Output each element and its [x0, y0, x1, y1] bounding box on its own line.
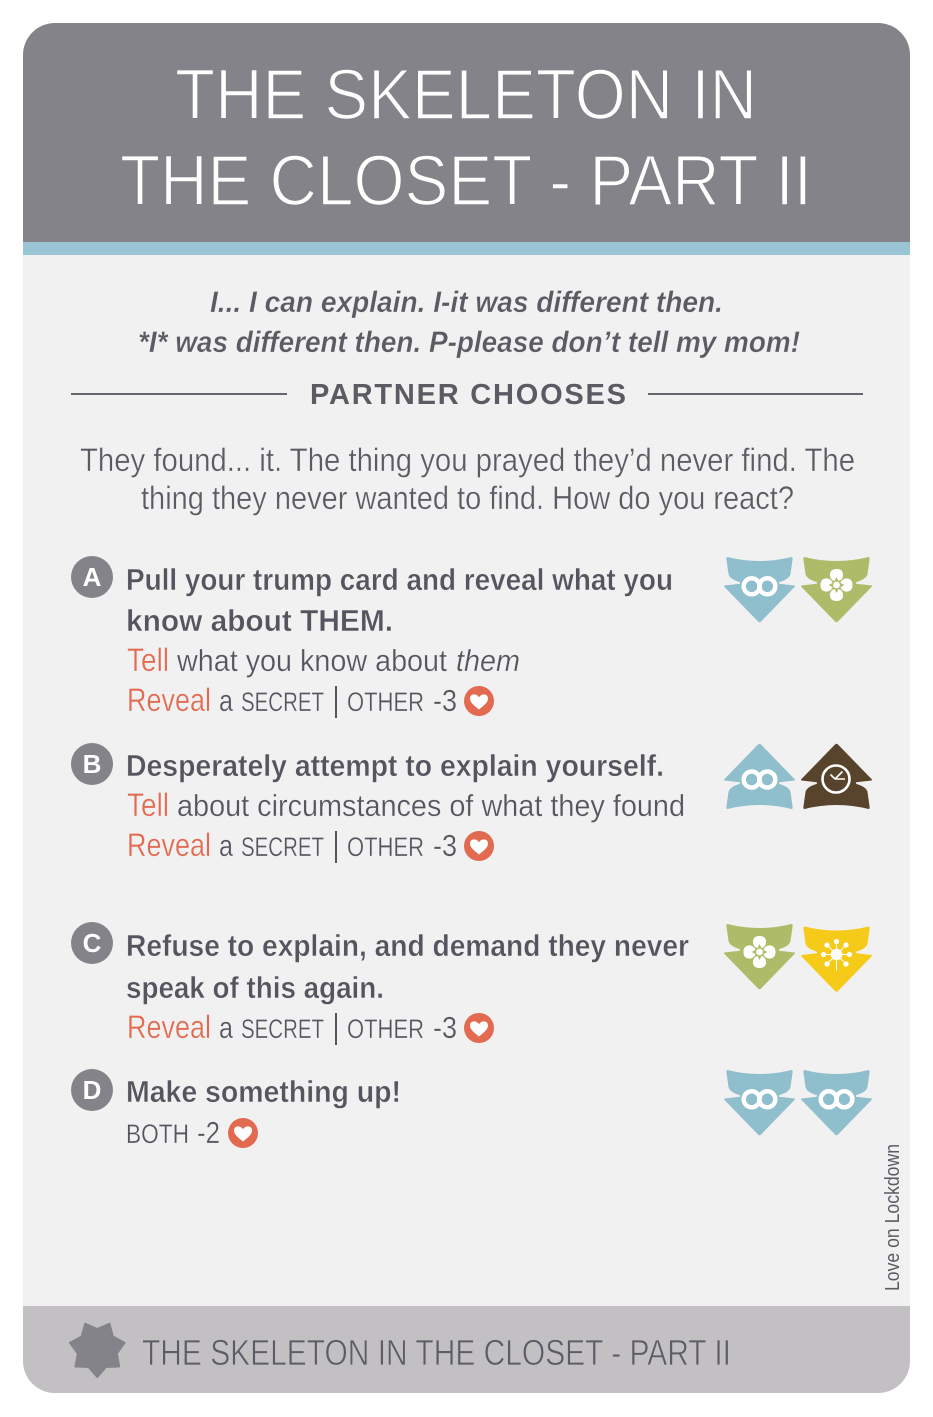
icon: heart	[464, 831, 494, 861]
option D cost line	[126, 1115, 220, 1150]
option C heading: Refuse to explain, and demand they never	[126, 928, 689, 963]
option A reveal line: -3	[433, 683, 457, 718]
icon: yellow burst arrow	[801, 926, 872, 992]
option A reveal line: Reveal	[127, 682, 211, 718]
option B reveal line	[127, 827, 457, 863]
badge A	[71, 556, 113, 598]
option A tell line: them	[456, 643, 520, 678]
option C reveal line: SECRET	[241, 1014, 324, 1044]
icon: heart	[228, 1118, 258, 1148]
option A reveal line	[127, 682, 457, 718]
title	[120, 56, 812, 221]
option A heading	[126, 562, 673, 638]
option B reveal line: a	[219, 828, 234, 863]
intro text: They found... it. The thing you prayed they’d never find. The	[80, 442, 855, 478]
badge D: D	[83, 1075, 101, 1105]
option D heading: Make something up!	[126, 1074, 401, 1109]
badge B: B	[83, 749, 101, 779]
title: THE CLOSET - PART II	[120, 142, 812, 221]
option C reveal line: -3	[433, 1010, 457, 1045]
icon: heart	[464, 1013, 494, 1043]
badge A: A	[83, 562, 102, 592]
option C	[71, 922, 872, 1045]
icon: brown clock up arrow	[801, 744, 872, 809]
option D	[71, 1069, 872, 1150]
option D cost line: BOTH	[126, 1119, 189, 1149]
option B reveal line: SECRET	[241, 832, 324, 862]
option B reveal line: -3	[433, 828, 457, 863]
option A reveal line: SECRET	[241, 687, 324, 717]
icon: green flower arrow	[724, 924, 795, 989]
footer bar	[23, 1306, 910, 1393]
option C reveal line: Reveal	[127, 1009, 211, 1045]
option B tell line: about circumstances of what they found	[177, 788, 685, 823]
footer title: THE SKELETON IN THE CLOSET - PART II	[142, 1332, 731, 1373]
option A heading: Pull your trump card and reveal what you	[126, 562, 673, 597]
option B tell line: Tell	[127, 787, 169, 823]
icon: blue infinity arrow	[724, 557, 795, 622]
credit: Love on Lockdown: Love on Lockdown	[882, 1144, 904, 1291]
option B heading: Desperately attempt to explain yourself.	[126, 748, 664, 783]
flavour quote: I... I can explain. I-it was different then.	[210, 286, 723, 319]
badge C	[71, 922, 113, 964]
badge C: C	[83, 928, 102, 958]
option A reveal line: OTHER	[347, 687, 424, 717]
icon: blue infinity arrow	[801, 1070, 872, 1135]
option C reveal line: a	[219, 1010, 234, 1045]
badge D	[71, 1069, 113, 1111]
option A	[71, 556, 872, 718]
option C reveal line: OTHER	[347, 1014, 424, 1044]
icon: heart	[464, 686, 494, 716]
intro text: thing they never wanted to find. How do you react?	[141, 480, 794, 516]
title: THE SKELETON IN	[175, 56, 757, 135]
option A tell line: Tell	[127, 642, 169, 678]
icon: footer seven-point star	[70, 1324, 125, 1377]
option C reveal line	[127, 1009, 457, 1045]
option A heading: know about THEM.	[126, 603, 393, 638]
section heading: partner chooses: PARTNER CHOOSES	[310, 379, 626, 411]
flavour quote: *I* was different then. P-please don’t tell my mom!	[138, 326, 800, 359]
option C heading	[126, 928, 689, 1005]
icon: blue infinity arrow	[724, 1070, 795, 1135]
icon: blue infinity up arrow	[724, 744, 795, 809]
flavour quote	[138, 286, 800, 359]
option A reveal line: a	[219, 683, 234, 718]
intro text	[80, 442, 855, 516]
header banner	[23, 23, 910, 255]
option A tell line: what you know about	[176, 643, 447, 678]
icon: green flower arrow	[801, 557, 872, 622]
option C heading: speak of this again.	[126, 970, 384, 1005]
option D cost line: -2	[197, 1115, 220, 1150]
badge B	[71, 743, 113, 785]
option B reveal line: Reveal	[127, 827, 211, 863]
option B	[71, 743, 872, 863]
option B reveal line: OTHER	[347, 832, 424, 862]
